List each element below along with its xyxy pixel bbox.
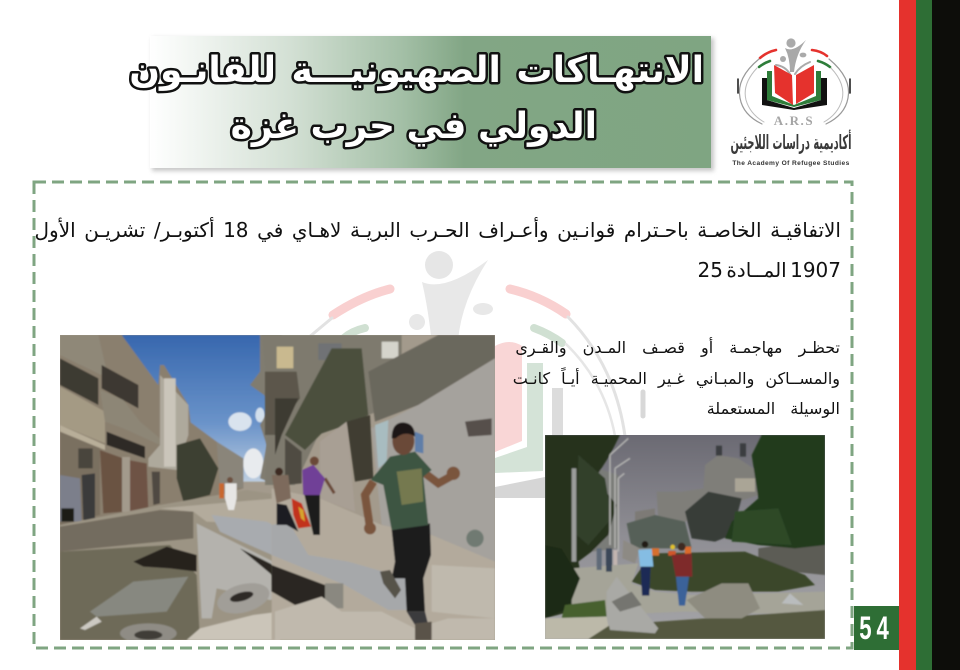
logo figure — [776, 38, 810, 74]
logo book — [762, 65, 827, 110]
photo: street with fallen trees — [545, 435, 825, 639]
side stripes — [899, 0, 960, 670]
heading text — [34, 217, 841, 282]
title: الانتهـاكات الصهيونيـــة للقانـون — [129, 50, 704, 91]
logo — [731, 38, 851, 167]
body text: تحظـر مهاجمـة أو قصـف المـدن والقـرى — [515, 337, 840, 358]
man in purple shirt — [304, 494, 320, 535]
ground right — [272, 488, 495, 640]
title banner — [129, 36, 714, 171]
man in white — [225, 483, 237, 510]
page number — [854, 606, 899, 650]
body text: والمســاكن والمبـاني غـير المحميـة أيـاً كانـت — [513, 366, 840, 389]
man in brown shirt — [277, 503, 298, 532]
logo calligraphy: أكاديمية دراسات اللاجئين — [731, 130, 851, 154]
ground left — [64, 494, 268, 627]
page number: 54 — [859, 610, 894, 646]
heading text: الاتفاقيـة الخاصـة باحـترام قوانـين وأعـراف الحـرب البريـة لاهـاي في 18 أكتوبـر/ تشريـن الأول — [34, 217, 841, 243]
dashed content frame — [34, 182, 852, 648]
red bag — [292, 498, 311, 528]
watermark logo — [308, 251, 643, 498]
title: الدولي في حرب غزة — [231, 106, 597, 147]
title — [129, 50, 704, 147]
logo initials: A.R.S — [774, 113, 814, 128]
rescuers — [597, 548, 602, 570]
logo english name: The Academy Of Refugee Studies — [732, 160, 850, 167]
body text: الوسيلة المستعملة — [707, 399, 840, 419]
left buildings — [60, 335, 243, 525]
heading text: 1907 المــادة 25 — [698, 258, 841, 282]
man running — [392, 523, 431, 612]
logo arcs — [738, 50, 850, 124]
photo: damaged street in Gaza — [60, 335, 495, 643]
right building edge — [250, 335, 268, 481]
body text — [513, 337, 840, 419]
